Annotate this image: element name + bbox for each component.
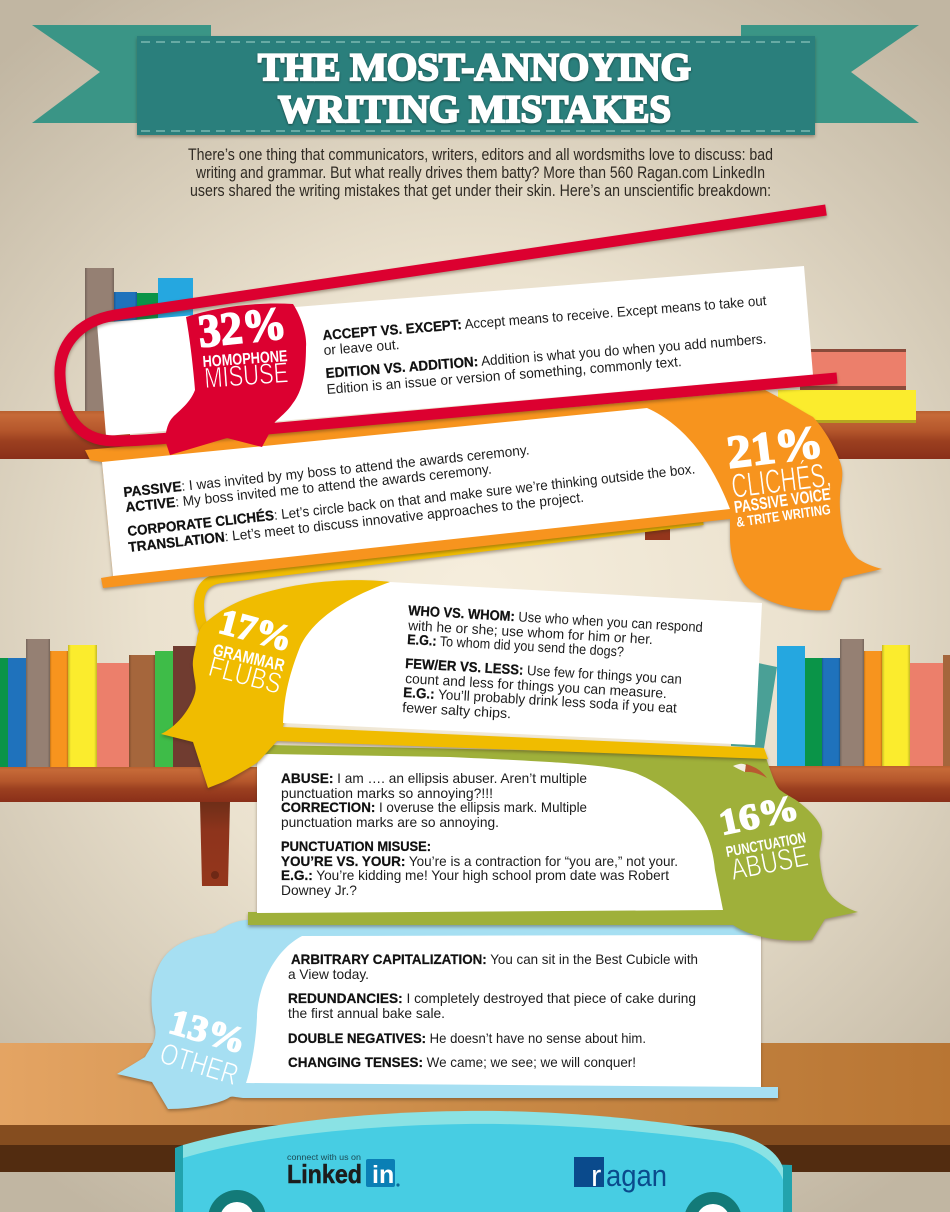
yellow loop strip [199,520,703,630]
body copy [123,441,696,555]
body copy: TRANSLATION: Let’s meet to discuss innovative approaches to the project. [128,489,585,555]
body copy: CORRECTION: I overuse the ellipsis mark. Multiple [281,799,587,815]
body copy: REDUNDANCIES: I completely destroyed that piece of cake during [288,990,696,1006]
green speech bubble [248,745,858,941]
label bold: HOMOPHONE [202,348,288,371]
LinkedIn logo: Linked [287,1159,362,1189]
body copy: EDITION VS. ADDITION: Addition is what you do when you add numbers. [325,330,767,381]
body copy: PUNCTUATION MISUSE: [281,838,431,854]
desk [0,1043,950,1172]
middle shelf right [760,766,950,802]
label thin: MISUSE [203,357,289,395]
body copy: Edition is an issue or version of something, commonly text. [326,353,682,397]
panel: 17% grammar flubs [161,520,768,788]
middle shelf left [0,767,257,802]
bubble cut-out [733,764,767,778]
percent: 21% [724,416,826,478]
tablet top highlight [183,1111,783,1212]
intro text: users shared the writing mistakes that get under their skin. Here’s an unscientific breakdown: [190,182,771,200]
binder hole left [208,1190,266,1212]
top shelf left [0,411,130,459]
body copy: CORPORATE CLICHÉS: Let’s circle back on that and make sure we’re thinking outside the box. [127,460,696,539]
body copy [402,602,703,721]
books: middle shelf right [777,639,950,766]
percent: 16% [715,787,802,843]
title: WRITING MISTAKES [278,88,671,131]
body copy: Downey Jr.? [281,882,357,898]
top shelf right [790,411,950,459]
label bold: GRAMMAR [211,640,287,675]
body copy: CHANGING TENSES: We came; we see; we will conquer! [288,1054,636,1070]
books: top shelf upright [85,268,193,411]
banner [137,36,815,135]
body copy: ABUSE: I am …. an ellipsis abuser. Aren’t multiple [281,770,587,786]
orange speech bubble [85,390,882,610]
body copy [281,770,678,898]
panel: 32% homophone misuse [60,210,837,455]
books: middle shelf left [0,639,203,767]
body copy: YOU’RE VS. YOUR: You’re is a contraction for “you are,” not your. [281,853,678,869]
label bold: PUNCTUATION [725,829,807,861]
intro text [188,146,773,200]
ribbon tail right [741,25,919,123]
body copy: WHO VS. WHOM: Use who when you can respond [408,602,703,635]
label thin: CLICHÉS, [729,456,833,506]
white card [97,266,813,436]
body copy: fewer salty chips. [402,699,512,721]
leaning teal book [731,663,777,748]
panel: 13% other [117,920,778,1109]
ribbon tail left [32,25,211,123]
white card [257,754,723,913]
tablet body [183,1124,783,1212]
body copy: ACCEPT VS. EXCEPT: Accept means to receive. Except means to take out [322,292,767,343]
intro text: writing and grammar. But what really drives them batty? More than 560 Ragan.com LinkedIn [195,164,765,182]
shelf bracket [200,802,230,886]
white card [283,582,762,745]
label bold: PASSIVE VOICE [733,485,832,517]
red speech bubble [165,304,306,455]
body copy: E.G.: You’re kidding me! Your high school prom date was Robert [281,867,669,883]
tablet side [175,1145,792,1212]
ragan logo: agan [606,1158,667,1193]
ragan logo [574,1157,667,1193]
body copy: a View today. [288,966,369,982]
body copy: ACTIVE: My boss invited me to attend the awards ceremony. [125,461,492,515]
white card [102,408,730,576]
label bold small: & TRITE WRITING [735,501,832,530]
books: top shelf stacked [778,349,916,423]
LinkedIn logo: in [372,1161,394,1189]
body copy: or leave out. [323,336,400,358]
footer tablet [175,1111,792,1212]
percent: 17% [215,601,297,659]
blue speech bubble [117,920,778,1109]
body copy: with he or she; use whom for him or her. [407,617,653,647]
LinkedIn logo [287,1152,400,1189]
yellow speech bubble [161,580,768,788]
body copy: ARBITRARY CAPITALIZATION: You can sit in the Best Cubicle with [291,951,698,967]
body copy: the first annual bake sale. [288,1005,445,1021]
body copy [288,951,698,1070]
percent: 13% [165,1001,251,1061]
panel: 16% punctuation abuse [248,745,858,941]
body copy: FEW/ER VS. LESS: Use few for things you can [405,655,682,687]
bracket behind orange panel [645,525,670,540]
body copy [322,292,767,397]
body copy: punctuation marks so annoying?!!! [281,785,493,801]
panel: 21% cliches [85,390,882,610]
binder hole right [684,1192,742,1212]
body copy: PASSIVE: I was invited by my boss to attend the awards ceremony. [123,441,530,500]
white card [246,935,761,1087]
label thin: FLUBS [205,651,285,701]
percent: 32% [196,297,289,357]
body copy: E.G.: To whom did you send the dogs? [407,631,625,659]
red loop strip [60,210,837,441]
LinkedIn logo: connect with us on [287,1152,361,1162]
label: OTHER [156,1037,242,1092]
title [258,46,691,131]
body copy: count and less for things you can measure. [405,670,667,701]
body copy: punctuation marks are so annoying. [281,814,499,830]
ragan logo: r [591,1158,601,1193]
label thin: ABUSE [728,840,811,887]
intro text: There’s one thing that communicators, writers, editors and all wordsmiths love to discuss: bad [188,146,773,164]
body copy: DOUBLE NEGATIVES: He doesn’t have no sense about him. [288,1030,646,1046]
body copy: E.G.: You’ll probably drink less soda if you eat [403,684,677,716]
title: THE MOST-ANNOYING [258,46,691,89]
